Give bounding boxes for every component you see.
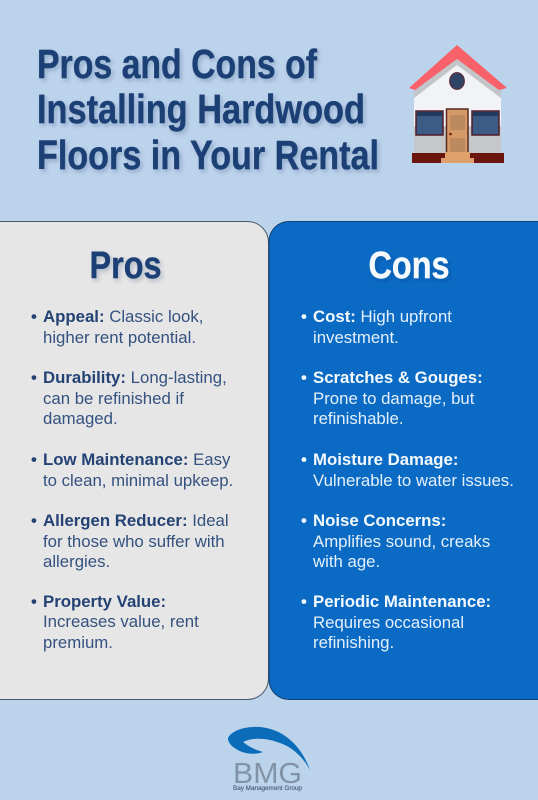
heading: cons: Cons [368,245,450,287]
icon: round attic window [450,73,464,89]
list item: low maintenance [31,450,233,490]
list item: durability: damaged. [43,409,118,428]
title: Floors in Your Rental [37,132,379,178]
panel: cons [269,222,538,700]
icon: left window [416,111,443,135]
panel: pros [0,222,268,700]
list item: periodic maintenance: Requires occasional [313,613,464,632]
list item: cost: • [301,307,307,326]
list item: property value [31,592,199,652]
list item: periodic maintenance: Periodic Maintenance: [313,592,491,611]
icon: door [446,109,468,154]
list item: property value: premium. [43,633,113,652]
icon: right window [472,111,499,135]
list item: scratches and gouges: • [301,368,307,387]
list item: moisture damage [301,450,514,490]
icon: foundation [412,152,504,163]
list item: noise concerns: with age. [312,552,380,571]
heading: pros: Pros [90,245,162,287]
list item: property value: Property Value: [43,592,166,611]
title: Installing Hardwood [37,86,365,132]
list item: allergen reducer: Allergen Reducer: Ideal [43,511,229,530]
list item: periodic maintenance: • [301,592,307,611]
list item: scratches and gouges [301,368,483,428]
list item: property value: Increases value, rent [43,612,199,631]
title [37,41,379,178]
list item: cost: investment. [313,328,399,347]
list item: periodic maintenance [301,592,491,652]
list item: cost: Cost: High upfront [313,307,452,326]
list item: durability: Durability: Long-lasting, [43,368,227,387]
list item: scratches and gouges: Prone to damage, but [313,389,475,408]
list item: durability: • [31,368,37,387]
list item: moisture damage: Vulnerable to water issues. [313,471,514,490]
list item: appeal [31,307,203,347]
list item: property value: • [31,592,37,611]
icon: wave swoosh [228,727,310,770]
icon: house [409,45,507,163]
title: Pros and Cons of [37,41,317,87]
list item: noise concerns: Amplifies sound, creaks [313,532,490,551]
list item: scratches and gouges: refinishable. [313,409,404,428]
logo: BMG [228,727,310,792]
list item: noise concerns [301,511,490,571]
list item: low maintenance: to clean, minimal upkeep. [43,471,233,490]
list item: appeal: • [31,307,37,326]
list item: noise concerns: • [301,511,307,530]
logo tagline: Bay Management Group [233,785,302,792]
list item: durability: can be refinished if [43,389,184,408]
logo wordmark: BMG [233,758,302,790]
list item: durability [31,368,227,428]
list item: moisture damage: • [301,450,307,469]
list item: allergen reducer [31,511,229,571]
list item: appeal: Appeal: Classic look, [43,307,203,326]
list item: moisture damage: Moisture Damage: [313,450,458,469]
list item: allergen reducer: • [31,511,37,530]
list item: low maintenance: Low Maintenance: Easy [43,450,231,469]
list item: periodic maintenance: refinishing. [313,633,394,652]
list item: low maintenance: • [31,450,37,469]
list item: allergen reducer: allergies. [43,552,110,571]
list item: allergen reducer: for those who suffer with [43,532,225,551]
list item: noise concerns: Noise Concerns: [313,511,446,530]
list item: scratches and gouges: Scratches & Gouges: [313,368,483,387]
list item: appeal: higher rent potential. [43,328,196,347]
list item: cost [301,307,452,347]
